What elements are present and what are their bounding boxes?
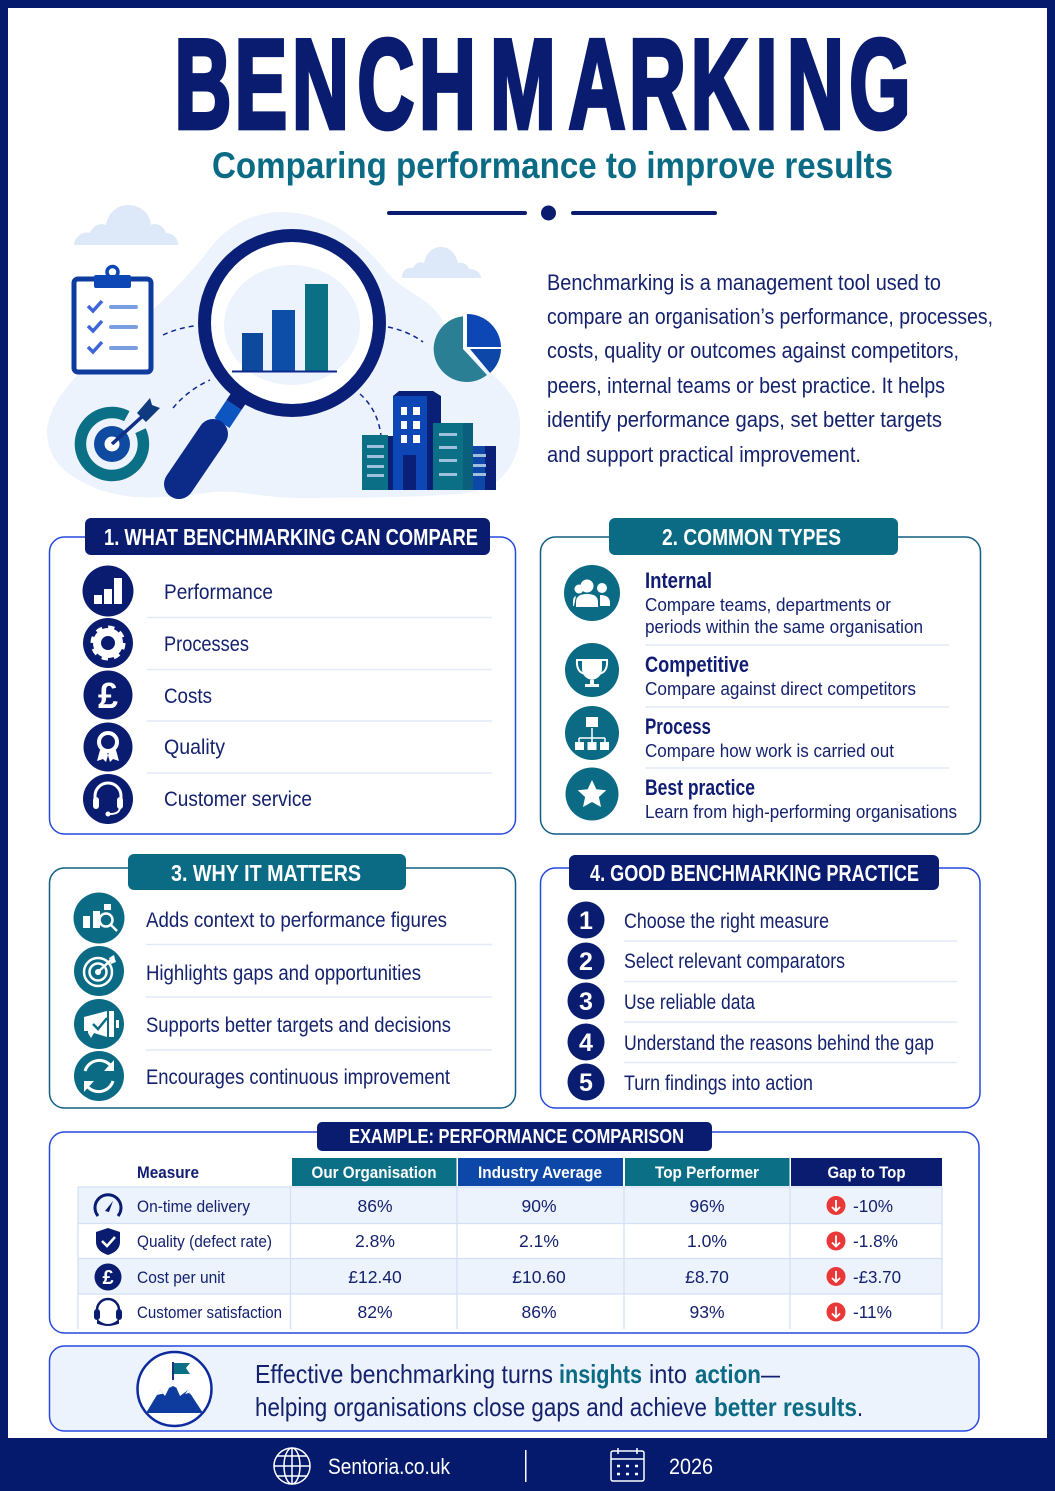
row: cost per unit: Cost per unit — [137, 1268, 225, 1287]
step 2: Select relevant comparators — [624, 950, 845, 973]
lens glow — [224, 265, 360, 385]
step 4: Understand the reasons behind the gap — [624, 1032, 934, 1055]
icon: office buildings — [362, 391, 496, 490]
step 1 — [568, 902, 829, 938]
table header row: Our Organisation — [312, 1163, 436, 1182]
item: quality — [84, 722, 225, 772]
row: quality defect rate: 1.0% — [687, 1231, 727, 1251]
row: customer satisfaction — [94, 1299, 892, 1325]
table header row: Industry Average — [478, 1163, 602, 1182]
item: adds context — [74, 892, 447, 944]
item: adds context: Adds context to performance figures — [146, 909, 447, 932]
icon: magnifying glass handle — [179, 393, 242, 484]
callout text — [255, 1359, 863, 1422]
item: continuous improvement — [74, 1051, 450, 1101]
type: best practice — [566, 768, 957, 822]
row: customer satisfaction: Customer satisfaction — [137, 1303, 282, 1322]
row: customer satisfaction: -11% — [853, 1302, 892, 1322]
type: competitive — [565, 643, 916, 699]
row: cost per unit: £8.70 — [685, 1267, 729, 1287]
table header row: Top Performer — [655, 1163, 759, 1182]
intro paragraph: costs, quality or outcomes against competitors, — [547, 338, 959, 363]
panel: good benchmarking practice — [540, 855, 980, 1108]
type: process: Process — [645, 714, 711, 739]
type: internal: Compare teams, departments or — [645, 595, 891, 615]
item: costs — [84, 670, 212, 720]
connector dashes — [163, 326, 423, 436]
illustration backdrop — [47, 212, 520, 498]
icon: pie chart — [434, 314, 501, 382]
type: process — [565, 706, 894, 761]
callout text: insights — [559, 1359, 642, 1389]
hero illustration: magnifying glass with business icons — [47, 205, 520, 498]
icon: target with arrow — [80, 398, 160, 475]
icon: mountain with flag — [138, 1352, 212, 1426]
type: competitive: Compare against direct competitors — [645, 679, 916, 699]
heading — [317, 1122, 712, 1151]
intro paragraph: and support practical improvement. — [547, 442, 861, 467]
row: on-time delivery: On-time delivery — [137, 1197, 250, 1216]
callout text: action — [695, 1359, 761, 1389]
row: on-time delivery: 86% — [357, 1196, 393, 1216]
intro paragraph: peers, internal teams or best practice. It helps — [547, 373, 945, 398]
icon: clipboard checklist — [74, 266, 151, 372]
heading — [609, 518, 898, 555]
item: continuous improvement: Encourages continuous improvement — [146, 1066, 450, 1089]
icon: small cloud — [402, 247, 481, 278]
panel: why it matters — [50, 854, 516, 1108]
step 4: 4 — [579, 1029, 593, 1057]
heading — [85, 518, 490, 555]
panel: common types — [540, 518, 980, 834]
heading — [128, 854, 406, 890]
callout text: — — [761, 1359, 780, 1389]
footer bar — [0, 1438, 1055, 1491]
item: quality: Quality — [164, 736, 225, 759]
icon: calendar — [611, 1448, 644, 1481]
panel: what benchmarking can compare — [50, 518, 516, 834]
website: Sentoria.co.uk — [328, 1454, 451, 1479]
item: processes — [83, 618, 249, 668]
icon: globe — [274, 1448, 310, 1484]
type: internal: periods within the same organisation — [645, 617, 923, 637]
item: highlights gaps — [74, 946, 421, 996]
step 1: 1 — [579, 907, 593, 935]
callout text: Effective benchmarking turns — [255, 1359, 553, 1389]
row: quality defect rate: -1.8% — [853, 1231, 898, 1251]
row: on-time delivery — [95, 1195, 893, 1216]
item: customer service: Customer service — [164, 788, 312, 811]
step 1: Choose the right measure — [624, 910, 829, 933]
step 5: 5 — [579, 1069, 593, 1097]
type: competitive: Competitive — [645, 652, 749, 677]
row: customer satisfaction: 82% — [357, 1302, 393, 1322]
row: on-time delivery: -10% — [853, 1196, 893, 1216]
step 2: 2 — [579, 948, 593, 976]
row: quality defect rate: 2.8% — [355, 1231, 395, 1251]
icon: magnifying glass lens — [204, 236, 380, 410]
heading: EXAMPLE: PERFORMANCE COMPARISON — [349, 1126, 684, 1148]
item: supports targets — [74, 999, 451, 1049]
heading: 3. WHY IT MATTERS — [171, 860, 361, 886]
step 5: Turn findings into action — [624, 1072, 813, 1095]
item: processes: Processes — [164, 633, 249, 656]
row: quality defect rate: Quality (defect rate) — [137, 1232, 272, 1251]
row: customer satisfaction: 86% — [521, 1302, 557, 1322]
item: highlights gaps: Highlights gaps and opportunities — [146, 962, 421, 985]
item: costs: £ — [98, 675, 118, 716]
type: best practice: Best practice — [645, 775, 755, 800]
intro paragraph: identify performance gaps, set better targets — [547, 407, 942, 432]
item: supports targets: Supports better targets and decisions — [146, 1014, 451, 1037]
table header row: Measure — [137, 1164, 199, 1182]
comparison table — [78, 1158, 942, 1329]
row: quality defect rate — [96, 1228, 898, 1255]
title divider — [387, 206, 717, 220]
table header row: Gap to Top — [828, 1163, 906, 1182]
type: process: Compare how work is carried out — [645, 741, 894, 761]
year: 2026 — [669, 1454, 713, 1479]
heading — [569, 855, 939, 890]
item: customer service — [83, 774, 312, 824]
step 3: Use reliable data — [624, 991, 755, 1014]
intro paragraph: Benchmarking is a management tool used to — [547, 270, 941, 295]
type: internal — [564, 565, 923, 637]
table row shading — [78, 1187, 942, 1294]
icon: large cloud — [74, 205, 178, 245]
row: cost per unit: £12.40 — [348, 1267, 402, 1287]
step 3 — [568, 982, 755, 1020]
step 2 — [568, 942, 845, 980]
item: costs: Costs — [164, 685, 212, 708]
step 4 — [568, 1024, 934, 1060]
title: BENCHMARKING — [175, 14, 911, 156]
intro paragraph — [547, 270, 993, 467]
row: on-time delivery: 96% — [689, 1196, 725, 1216]
row: cost per unit — [94, 1264, 901, 1290]
callout: key takeaway — [50, 1346, 979, 1431]
row: on-time delivery: 90% — [521, 1196, 557, 1216]
callout text: better results — [714, 1392, 857, 1422]
heading: 2. COMMON TYPES — [662, 524, 841, 550]
item: performance — [82, 566, 273, 616]
row: cost per unit: £10.60 — [512, 1267, 566, 1287]
item: performance: Performance — [164, 581, 273, 604]
intro paragraph: compare an organisation’s performance, processes, — [547, 304, 993, 329]
type: internal: Internal — [645, 568, 712, 593]
type: best practice: Learn from high-performing organisations — [645, 802, 957, 822]
subtitle: Comparing performance to improve results — [212, 145, 893, 186]
callout text: helping organisations close gaps and achieve — [255, 1392, 707, 1422]
heading: 4. GOOD BENCHMARKING PRACTICE — [590, 860, 919, 886]
step 5 — [568, 1064, 813, 1100]
table header row — [137, 1158, 942, 1186]
heading: 1. WHAT BENCHMARKING CAN COMPARE — [104, 524, 478, 550]
row: customer satisfaction: 93% — [689, 1302, 725, 1322]
callout text: . — [857, 1392, 863, 1422]
row: cost per unit: -£3.70 — [853, 1267, 901, 1287]
row: cost per unit: £ — [102, 1267, 114, 1289]
row: quality defect rate: 2.1% — [519, 1231, 559, 1251]
panel: example performance comparison — [50, 1122, 979, 1333]
bar chart in lens — [232, 284, 337, 372]
step 3: 3 — [579, 988, 593, 1016]
callout text: into — [649, 1359, 687, 1389]
